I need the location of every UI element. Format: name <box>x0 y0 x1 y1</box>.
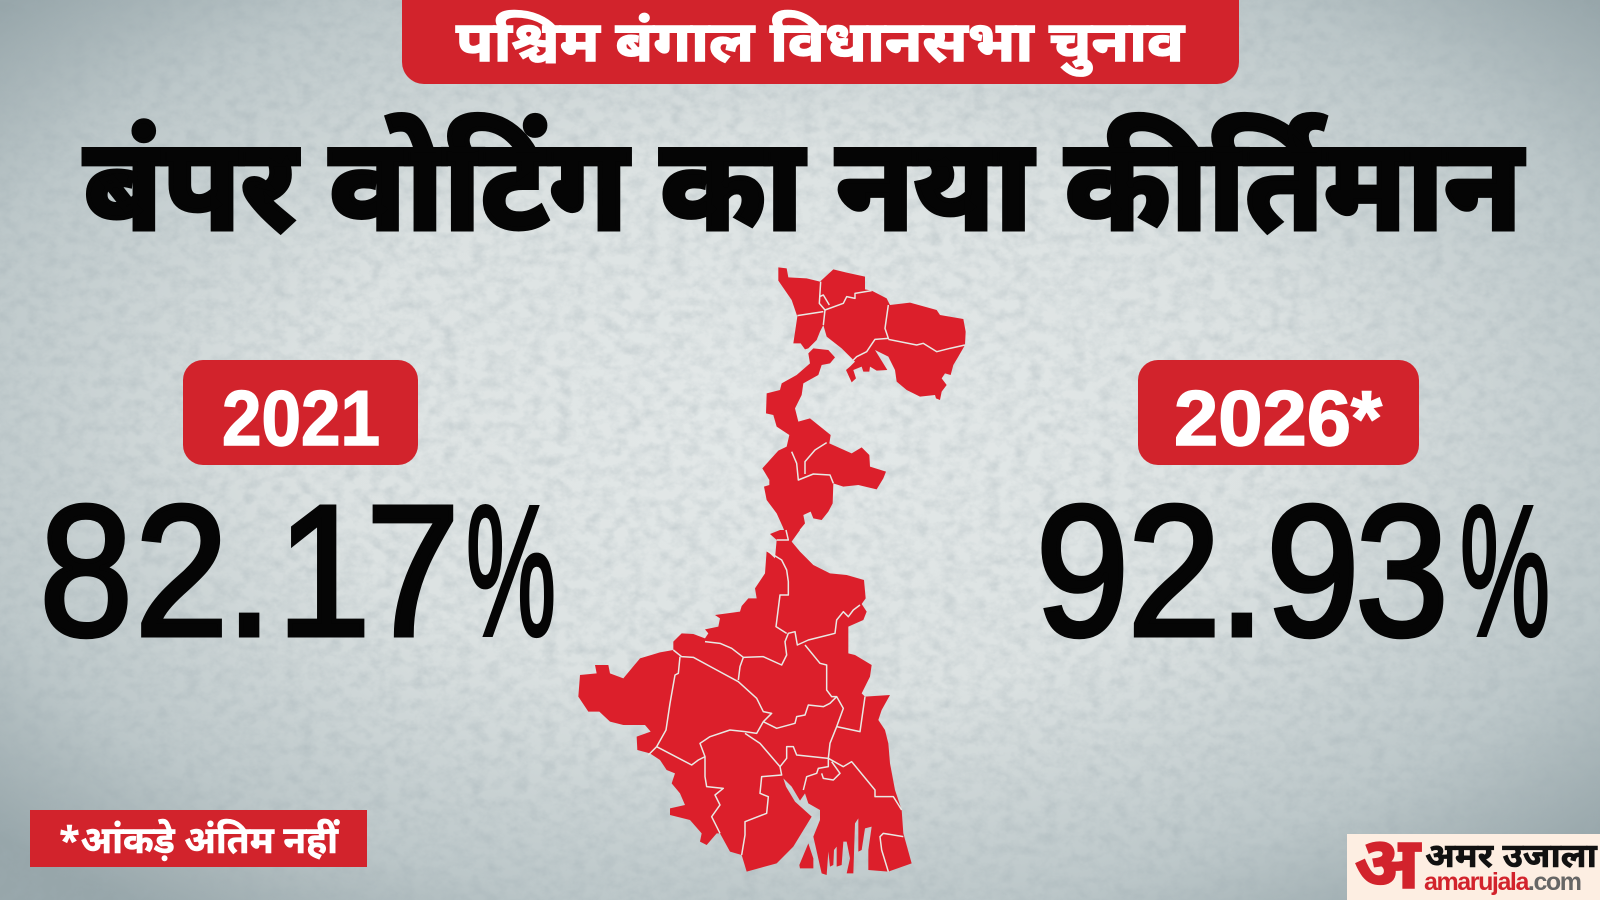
header banner: पश्चिम बंगाल विधानसभा चुनाव <box>456 11 1185 84</box>
footnote: *आंकड़े अंतिम नहीं <box>58 818 340 869</box>
logo: Amar Ujala: अमर उजाला <box>1425 837 1598 881</box>
value 82.17%: 82.17 <box>40 468 459 675</box>
stat: 2021 <box>40 360 556 675</box>
logo: Amar Ujala: amarujala.com <box>1424 868 1582 896</box>
title: बंपर वोटिंग का नया कीर्तिमान <box>84 114 1524 282</box>
southern districts <box>578 530 912 875</box>
year badge 2026: 2026* <box>1174 374 1383 462</box>
map: West Bengal districts <box>578 267 966 875</box>
year badge 2021 <box>183 360 418 465</box>
year badge 2026 <box>1138 360 1419 465</box>
value 82.17%: % <box>466 468 556 675</box>
value 92.93%: 92.93 <box>1036 468 1448 675</box>
year badge 2021: 2021 <box>222 374 380 462</box>
logo: Amar Ujala <box>1347 824 1600 900</box>
header banner <box>402 0 1239 84</box>
stat: 2026 <box>1036 360 1550 675</box>
northern districts <box>762 267 966 542</box>
